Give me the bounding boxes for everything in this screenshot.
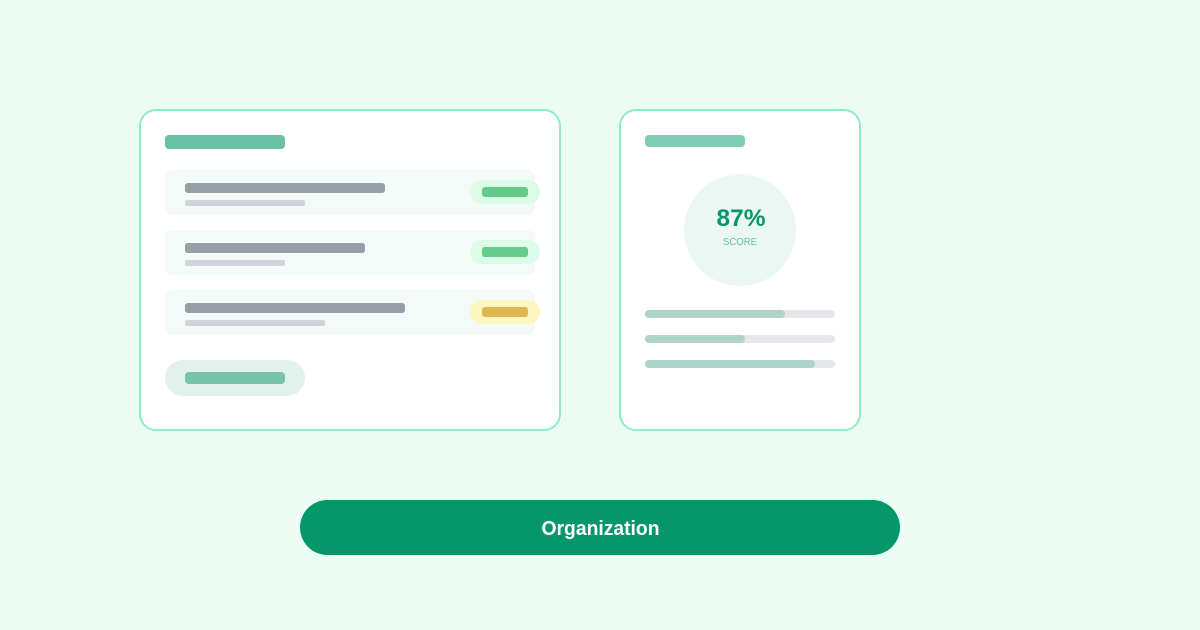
- panel: list card: [140, 110, 560, 430]
- organization banner: [300, 500, 900, 555]
- card action button: [165, 360, 305, 396]
- card heading placeholder: [165, 135, 285, 149]
- progress bar 1: [645, 310, 835, 318]
- list row 3: [165, 290, 540, 335]
- banner label: Organization: [542, 518, 660, 540]
- score label: SCORE: [723, 237, 757, 248]
- card heading placeholder: [645, 135, 745, 147]
- card frame: [140, 110, 560, 430]
- panel: score card: [620, 110, 860, 430]
- status badge: yellow: [470, 300, 540, 324]
- score gauge: [684, 174, 796, 286]
- score value: 87%: [716, 205, 766, 232]
- status badge: green: [470, 180, 540, 204]
- list row 1: [165, 170, 540, 215]
- progress bar 3: [645, 360, 835, 368]
- progress bar 2: [645, 335, 835, 343]
- status badge: green: [470, 240, 540, 264]
- card frame: [620, 110, 860, 430]
- list row 2: [165, 230, 540, 275]
